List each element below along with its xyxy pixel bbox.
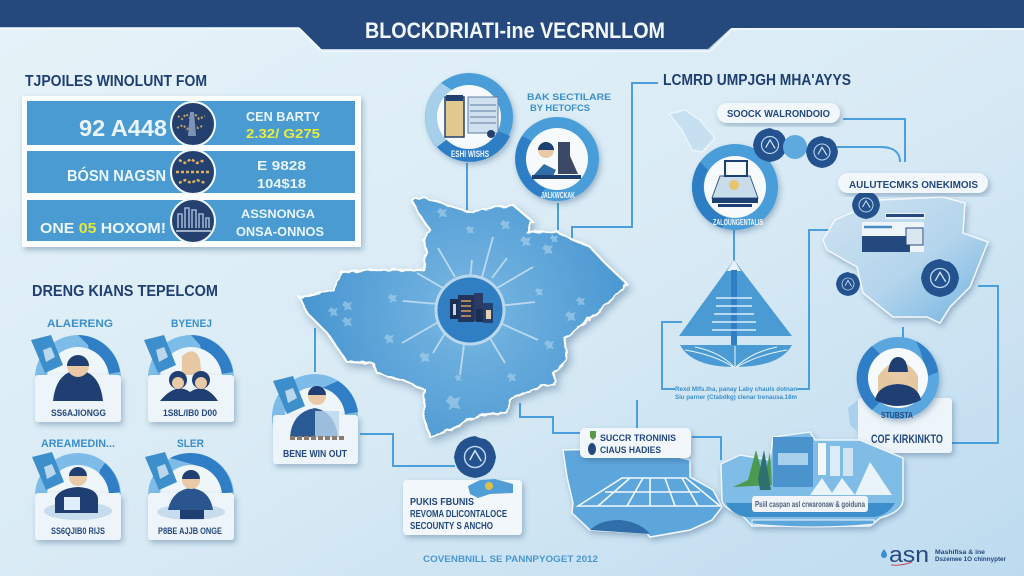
- pill label: dome: [580, 428, 691, 458]
- circle: machine: [692, 144, 778, 230]
- row 2: BÓSN NAGSN: [67, 166, 166, 185]
- person card 2: BYENEJ: [171, 318, 212, 330]
- person card 3: [32, 438, 121, 540]
- pill label: dome: SUCCR TRONINIS: [600, 433, 676, 444]
- person card 1: SS6AJIONGG: [51, 408, 106, 418]
- chart: pyramid with bowl: [679, 260, 792, 367]
- logo: Mashifisa & ine: [935, 549, 985, 556]
- circle: portrait card: [848, 337, 952, 453]
- logo: Dszenwe 1O chinnypter: [935, 556, 1006, 563]
- row 3: ONSA-ONNOS: [236, 224, 324, 239]
- radial spokes: [402, 237, 538, 375]
- icon: crowd circle: [171, 150, 215, 194]
- row 1: [27, 101, 355, 145]
- connector lines: [315, 83, 998, 466]
- callout: security note: REVOMA DLICONTALOCE: [410, 509, 507, 520]
- circle: equipment: [425, 73, 513, 162]
- circle: portrait card: COF KIRKINKTO: [871, 432, 943, 446]
- circle: machine: ZALOUNGENTALIS: [713, 218, 763, 227]
- heading: top left: TJPOILES WINOLUNT FOM: [25, 73, 207, 90]
- pill label: dome: CIAUS HADIES: [600, 445, 661, 456]
- row 2: E 9828: [257, 158, 306, 173]
- person card: centre left: BENE WIN OUT: [283, 449, 347, 460]
- callout: security note: SECOUNTY S ANCHO: [410, 521, 493, 532]
- person card 3: AREAMEDIN...: [41, 438, 115, 450]
- row 3: ASSNONGA: [241, 207, 315, 221]
- panel: stats table: [22, 96, 361, 247]
- pill label: right: [838, 173, 988, 193]
- circle: equipment: ESHI WISHS: [451, 149, 489, 159]
- text: pyramid caption: [675, 386, 797, 401]
- map: central region: [300, 197, 628, 437]
- pill label: right: AULUTECMKS ONEKIMOIS: [849, 179, 978, 191]
- person card 1: [31, 318, 121, 422]
- text: side label: [527, 92, 611, 114]
- icon: gears chain: [753, 128, 838, 168]
- text: side label: BAK SECTILARE: [527, 92, 611, 103]
- illustration: industry scene: Psiil caspan asl crwaronaw & goiduna: [755, 499, 865, 509]
- person card 4: P8BE AJJB ONGE: [158, 526, 222, 536]
- person card 4: SLER: [177, 438, 204, 450]
- person card 1: ALAERENG: [47, 318, 113, 330]
- heading: people section: DRENG KIANS TEPELCOM: [32, 283, 218, 300]
- row 3: ONE 05 HOXOM!: [40, 220, 166, 237]
- row 2: 104$18: [257, 176, 306, 191]
- illustration: industry scene: [721, 432, 903, 527]
- circle: portrait card: STUBSTA: [881, 411, 913, 420]
- icon: dome structure: [578, 478, 720, 506]
- callout: security note: [403, 479, 522, 535]
- row 2: [27, 151, 355, 193]
- row 1: CEN BARTY: [246, 109, 320, 124]
- person card: centre left: [272, 374, 358, 464]
- text: pyramid caption: Siu parner (Ctabdkg) clenar trenausa.18m: [675, 394, 797, 401]
- icon: lower gear: [454, 436, 496, 478]
- person card 2: [144, 318, 234, 422]
- circle: worker: [515, 117, 599, 201]
- callout: security note: PUKIS FBUNIS: [410, 497, 474, 508]
- text: pyramid caption: Rexd Mlfs.tha, panay Laby chauls dotnan: [675, 386, 797, 393]
- pill label: upper: [717, 103, 840, 123]
- row 1: 2.32/ G275: [246, 126, 320, 141]
- icon: hub buildings: [450, 293, 493, 323]
- icon: building circle: [171, 199, 215, 243]
- map: dome region: [563, 448, 722, 537]
- icon: city circle: [171, 102, 215, 146]
- logo: [881, 542, 1006, 567]
- person card 2: 1S8L/IB0 D00: [163, 408, 217, 418]
- circle: worker: JALKWCKAK: [541, 191, 575, 200]
- person card 3: SS6QJIB0 RIJS: [51, 526, 105, 536]
- icon: building: [862, 213, 925, 252]
- header banner: [0, 0, 1024, 51]
- footer text: COVENBNILL SE PANNPYOGET 2012: [423, 554, 598, 564]
- person card 4: [145, 438, 234, 540]
- icon: small map fragment: [669, 110, 715, 152]
- pill label: upper: SOOCK WALRONDOIO: [727, 108, 830, 120]
- title: BLOCKDRIATI-ine VECRNLLOM: [365, 18, 665, 43]
- central hub: [436, 276, 504, 344]
- row 3: [27, 200, 355, 241]
- map: right region: [823, 191, 988, 323]
- logo: asn: [889, 542, 929, 567]
- text: side label: BY HETOFCS: [530, 103, 590, 114]
- row 1: 92 A448: [79, 115, 167, 141]
- heading: upper right: LCMRD UMPJGH MHA'AYYS: [663, 72, 851, 89]
